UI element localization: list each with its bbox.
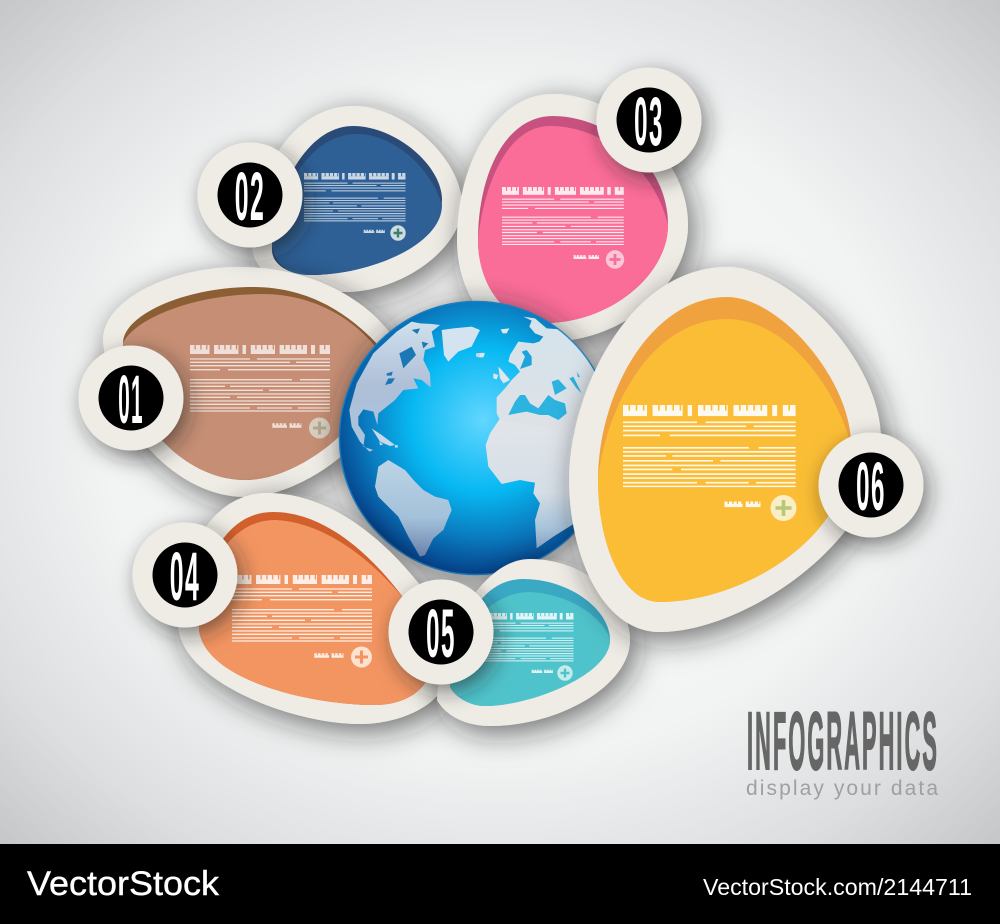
badge 02 bbox=[198, 142, 302, 248]
text block: 01 placeholder bbox=[190, 345, 330, 426]
badge 04: 04 bbox=[170, 537, 200, 615]
sea: hudson bay and lakes bbox=[385, 328, 428, 385]
watermark logo: VectorStock bbox=[27, 865, 220, 903]
watermark url: VectorStock.com/2144711 bbox=[703, 874, 972, 900]
land: caribbean bbox=[372, 353, 484, 448]
land: africa bbox=[486, 419, 574, 548]
badge 05: 05 bbox=[426, 594, 456, 672]
land: north america bbox=[349, 322, 440, 452]
icon: plus 03 bbox=[606, 250, 624, 269]
subtitle: display your data bbox=[746, 777, 938, 800]
badge 02: 02 bbox=[235, 157, 265, 235]
badge 03 bbox=[596, 68, 702, 172]
badge 05 bbox=[388, 580, 494, 684]
icon: plus 04 bbox=[351, 646, 372, 668]
badge 04 bbox=[132, 522, 238, 628]
text block: 02 placeholder bbox=[304, 173, 406, 232]
panel: 05 teal bbox=[437, 559, 630, 726]
icon: plus 01 bbox=[309, 418, 330, 438]
panel: 06 yellow bbox=[569, 267, 881, 632]
text block: 05 placeholder bbox=[472, 613, 574, 672]
badge 01: 01 bbox=[118, 361, 144, 438]
land: british isles and islands bbox=[480, 328, 510, 383]
land: south america bbox=[375, 460, 452, 557]
land: eurasia bbox=[496, 316, 595, 432]
panel: 04 orange bbox=[178, 493, 448, 724]
title: INFOGRAPHICS bbox=[747, 695, 939, 787]
badge 03: 03 bbox=[634, 82, 664, 160]
badge 01 bbox=[78, 346, 184, 450]
badge 06 bbox=[818, 432, 924, 538]
sea: mediterranean and inland seas bbox=[508, 372, 582, 420]
text block: 06 placeholder bbox=[623, 405, 796, 505]
icon: plus 02 bbox=[390, 225, 406, 241]
text block: 03 placeholder bbox=[502, 187, 624, 258]
panel: 01 brown bbox=[103, 267, 397, 497]
land: greenland bbox=[442, 327, 480, 362]
globe bbox=[339, 301, 620, 575]
text block: 04 placeholder bbox=[232, 575, 372, 656]
badge 06: 06 bbox=[856, 447, 886, 525]
icon: plus 05 bbox=[557, 665, 573, 681]
panel: 02 blue bbox=[252, 106, 462, 292]
icon: plus 06 bbox=[770, 495, 796, 521]
sea: baltic bbox=[520, 350, 532, 369]
footer band bbox=[0, 844, 1000, 924]
panel: 03 pink bbox=[457, 94, 688, 342]
